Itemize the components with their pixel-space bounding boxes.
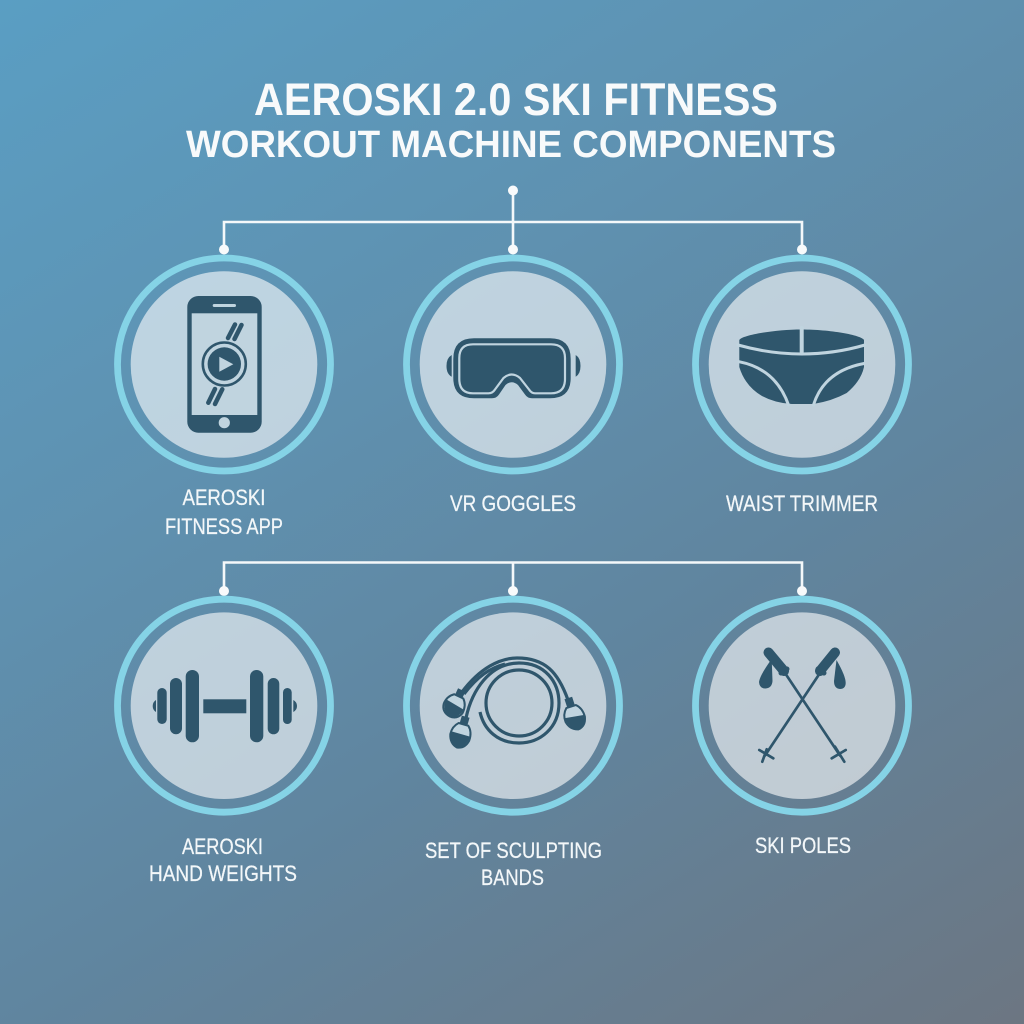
- panel: ski poles: [696, 599, 908, 858]
- icon: resistance bands: [440, 658, 588, 750]
- label: [149, 834, 297, 886]
- icon: VR goggles: [446, 338, 580, 398]
- label: [165, 485, 283, 539]
- label: WAIST TRIMMER: [726, 491, 878, 516]
- icon: waist trimmer: [738, 328, 865, 405]
- label: SKI POLES: [755, 833, 851, 858]
- label: FITNESS APP: [165, 514, 283, 539]
- icon: crossed ski poles: [759, 652, 846, 762]
- icon: smartphone with play button: [187, 296, 262, 433]
- panel: waist trimmer: [696, 258, 908, 516]
- title: WORKOUT MACHINE COMPONENTS: [186, 124, 836, 166]
- title: [186, 74, 836, 166]
- connector: bottom row: [219, 562, 807, 596]
- label: AEROSKI: [182, 834, 263, 859]
- label: HAND WEIGHTS: [149, 861, 297, 886]
- label: AEROSKI: [182, 485, 266, 510]
- label: VR GOGGLES: [450, 491, 576, 516]
- panel: Aeroski hand weights: [118, 599, 330, 886]
- label: BANDS: [481, 865, 544, 890]
- title: AEROSKI 2.0 SKI FITNESS: [254, 74, 778, 125]
- connector: top row: [219, 186, 807, 254]
- icon: dumbbell: [153, 670, 297, 742]
- panel: VR goggles: [406, 258, 620, 516]
- label: SET OF SCULPTING: [425, 838, 602, 863]
- label: [425, 838, 602, 890]
- panel: set of sculpting bands: [406, 599, 620, 890]
- panel: Aeroski fitness app: [118, 258, 330, 539]
